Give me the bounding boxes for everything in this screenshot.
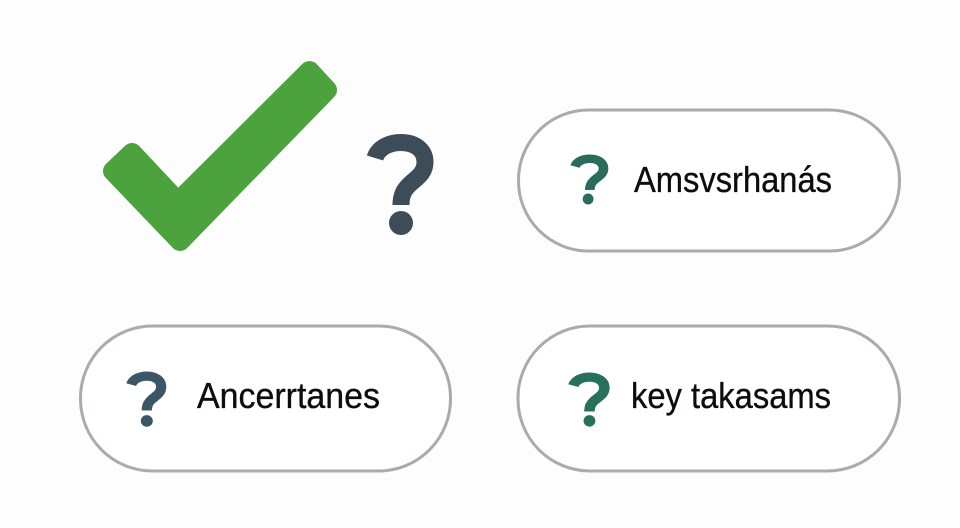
label: Ancerrtanes: Ancerrtanes xyxy=(197,375,380,416)
panel: bottom left pill xyxy=(80,326,450,471)
icon: large green check mark xyxy=(113,71,327,241)
icon: large dark question mark xyxy=(375,142,425,235)
icon: slate question mark xyxy=(131,376,161,427)
icon: green question mark xyxy=(575,159,603,204)
label: key takasams: key takasams xyxy=(631,375,831,416)
label: Amsvsrhanás: Amsvsrhanás xyxy=(634,159,832,200)
icon: green question mark xyxy=(573,377,604,427)
panel: bottom right pill xyxy=(518,326,900,471)
panel: top right pill xyxy=(518,110,900,251)
